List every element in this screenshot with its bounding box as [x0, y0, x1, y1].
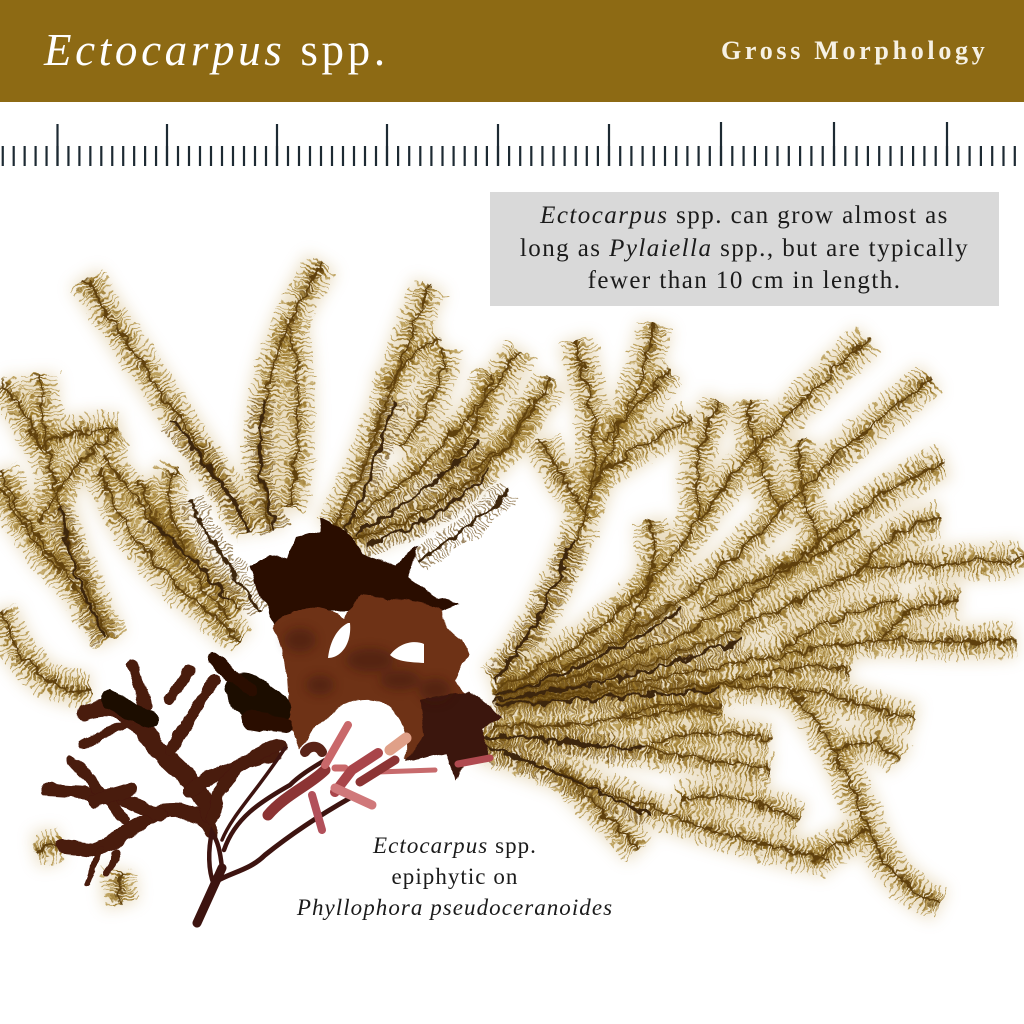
ruler: [2, 122, 1018, 166]
brown algae: Ectocarpus fronds: [0, 263, 1022, 905]
body mottling: [284, 628, 451, 702]
host alga: Phyllophora thallus: [250, 518, 503, 782]
dark lower lobe of body: [405, 690, 503, 782]
specimen caption: epiphytic on: [392, 864, 518, 889]
section label: Gross Morphology: [721, 36, 988, 65]
thallus holes: [328, 623, 424, 663]
main reddish body: [272, 595, 500, 782]
host alga stalks: [197, 748, 350, 923]
info callout: [490, 192, 999, 306]
specimen caption: Ectocarpus spp.: [373, 833, 537, 858]
info callout: Ectocarpus spp. can grow almost as: [540, 202, 949, 229]
dark crown of thallus: [250, 518, 460, 630]
branching lower thallus: [47, 660, 285, 885]
specimen caption: Phyllophora pseudoceranoides: [297, 895, 613, 920]
header band: [0, 0, 1024, 102]
info callout: long as Pylaiella spp., but are typically: [520, 234, 969, 262]
info callout: fewer than 10 cm in length.: [588, 267, 901, 294]
title: Ectocarpus spp.: [44, 25, 389, 75]
pink blades of host: [268, 725, 490, 830]
specimen caption: [296, 833, 613, 920]
